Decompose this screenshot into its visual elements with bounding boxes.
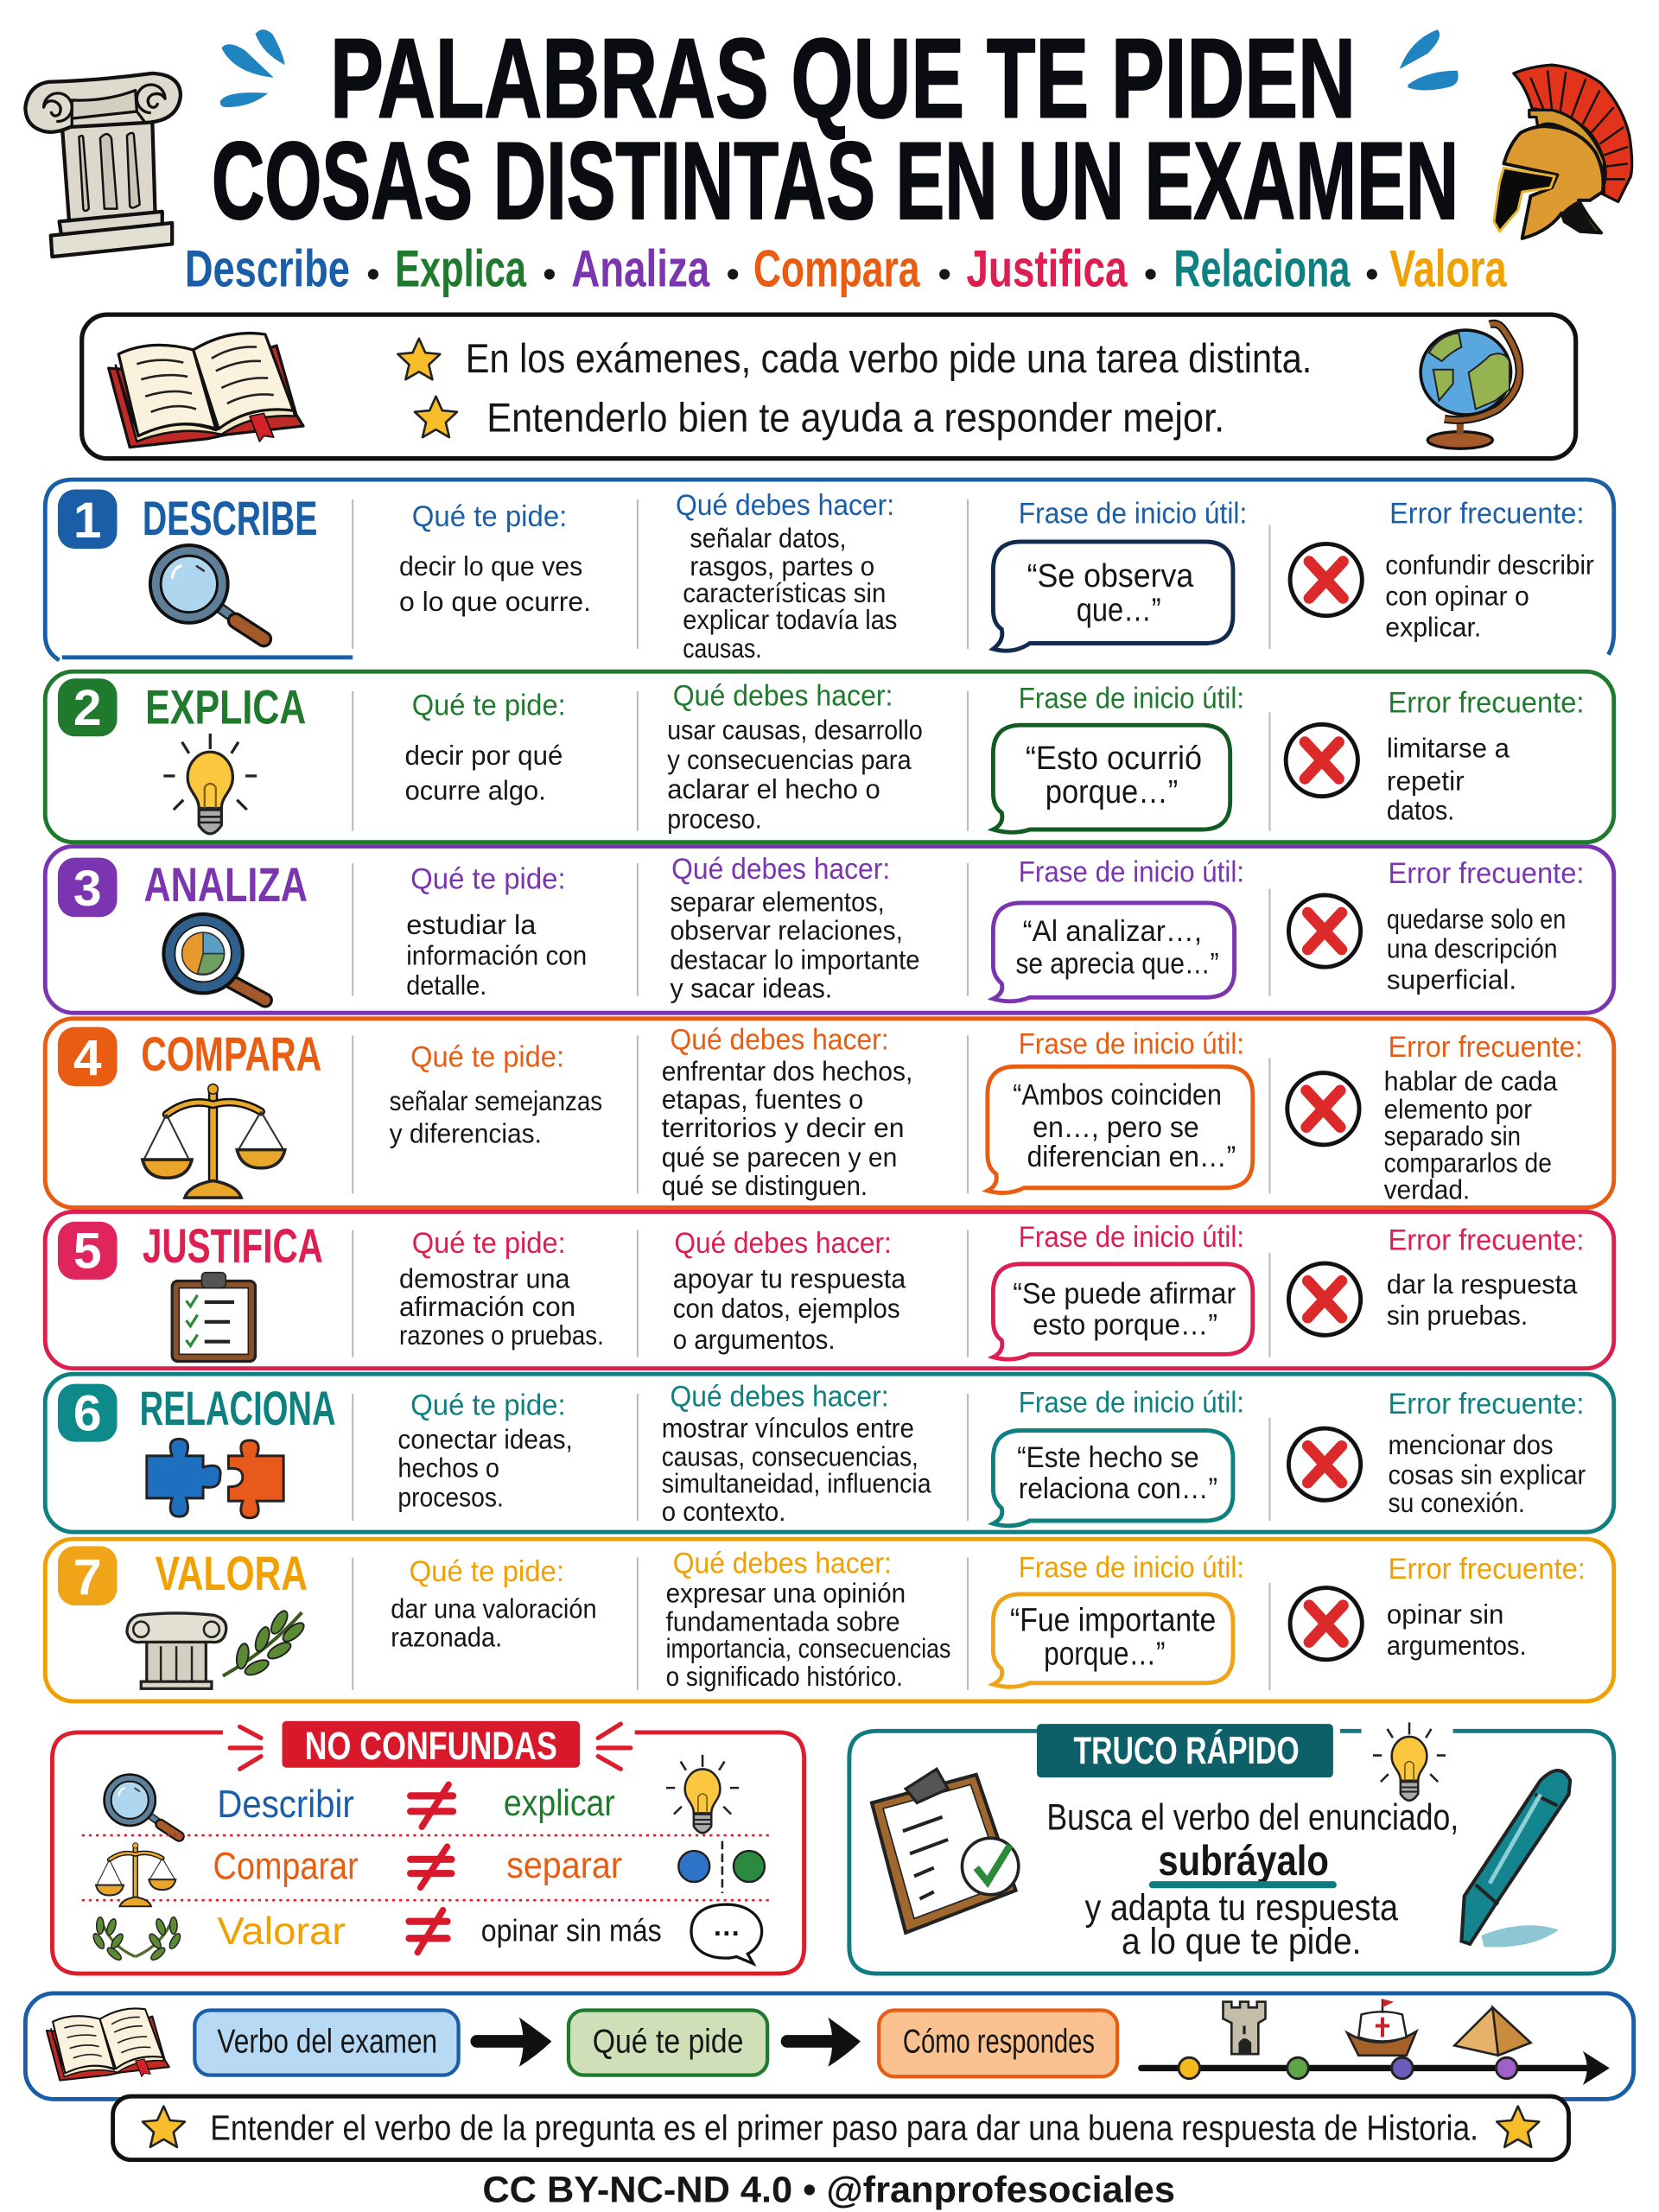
badge 4: 4	[73, 1030, 102, 1086]
badge 2	[58, 678, 118, 736]
column: qué debes hacer: explicar todavía las	[683, 605, 897, 635]
column: frase de inicio: Frase de inicio útil:	[1019, 1221, 1244, 1254]
column: frase de inicio	[993, 1551, 1244, 1687]
verb heading: JUSTIFICA	[143, 1219, 323, 1273]
column: qué te pide	[391, 1555, 597, 1652]
column: frase de inicio: se aprecia que…”	[1016, 948, 1219, 981]
column: frase de inicio: “Ambos coinciden	[1013, 1078, 1222, 1111]
text: tip: subráyalo	[1158, 1838, 1329, 1885]
text: tip: a lo que te pide.	[1122, 1921, 1362, 1961]
column: qué debes hacer: usar causas, desarrollo	[667, 715, 923, 746]
column: frase de inicio: porque…”	[1044, 1636, 1166, 1672]
panel: flow	[25, 1993, 1634, 2099]
verb heading: EXPLICA	[145, 681, 306, 734]
column: qué te pide: conectar ideas,	[397, 1425, 573, 1455]
column: qué debes hacer: expresar una opinión	[666, 1579, 906, 1609]
column dividers	[353, 863, 1269, 996]
panel: intro	[82, 315, 1576, 459]
column: frase de inicio	[993, 498, 1247, 651]
column: error frecuente: mencionar dos	[1389, 1430, 1554, 1460]
column: error frecuente: repetir	[1387, 766, 1465, 796]
column: qué debes hacer: enfrentar dos hechos,	[662, 1057, 912, 1087]
column: qué debes hacer: características sin	[683, 578, 886, 608]
icon: scales	[143, 1084, 285, 1198]
icon: light bulb	[163, 734, 257, 834]
column: qué debes hacer: apoyar tu respuesta	[673, 1264, 906, 1294]
column: qué debes hacer: proceso.	[667, 804, 762, 834]
panel: truco rapido	[849, 1722, 1614, 1974]
column: frase de inicio: esto porque…”	[1033, 1308, 1217, 1341]
icon: globe	[1421, 324, 1519, 448]
column: frase de inicio	[993, 683, 1244, 832]
icon: light bulb	[1373, 1722, 1446, 1801]
subtitle verbs: Valora	[1389, 238, 1507, 297]
column: qué debes hacer	[671, 853, 919, 1003]
column: qué debes hacer: territorios y decir en	[662, 1113, 905, 1143]
column: error frecuente	[1287, 1031, 1583, 1205]
banner: TRUCO RÁPIDO	[1073, 1729, 1300, 1772]
icon: two separated dots	[678, 1841, 765, 1893]
icon: marker pen	[1461, 1770, 1570, 1947]
column: error frecuente: dar la respuesta	[1387, 1269, 1578, 1300]
text: comparar: Comparar	[213, 1846, 359, 1888]
text: describir: Describir	[217, 1783, 354, 1826]
verb heading: RELACIONA	[140, 1382, 336, 1435]
intro line one: En los exámenes, cada verbo pide una tarea distinta.	[466, 336, 1312, 382]
column: error frecuente	[1288, 1388, 1586, 1518]
icon: ionic column	[25, 73, 181, 257]
column: error frecuente: elemento por	[1384, 1095, 1532, 1125]
column: qué debes hacer	[662, 1024, 912, 1201]
spark marks	[230, 1724, 631, 1769]
message text: Entender el verbo de la pregunta es el primer paso para dar una buena respuesta de Historia.	[210, 2108, 1478, 2148]
column: error frecuente: separado sin	[1384, 1122, 1521, 1152]
panel: 2 explica	[45, 671, 1614, 842]
column: qué debes hacer: señalar datos,	[690, 523, 847, 553]
intro line two: Entenderlo bien te ayuda a responder mejor.	[486, 396, 1224, 442]
icon: not equal	[409, 1910, 448, 1953]
column: error frecuente: opinar sin	[1387, 1599, 1503, 1630]
text: tip: y adapta tu respuesta	[1085, 1887, 1398, 1928]
column: frase de inicio: Frase de inicio útil:	[1019, 1386, 1244, 1419]
column: error frecuente: Error frecuente:	[1389, 857, 1584, 890]
column: qué te pide: Qué te pide:	[412, 690, 566, 722]
badge 7: 7	[73, 1549, 102, 1605]
column: error frecuente: una descripción	[1387, 934, 1557, 964]
column: qué debes hacer	[662, 1381, 931, 1527]
banner: NO CONFUNDAS	[305, 1724, 557, 1768]
banner	[1037, 1724, 1333, 1777]
column: error frecuente: su conexión.	[1389, 1488, 1525, 1518]
column: qué debes hacer: separar elementos,	[671, 887, 885, 918]
icon: star	[143, 2107, 185, 2147]
icon: tower	[1224, 2002, 1265, 2054]
badge 4	[58, 1027, 118, 1086]
column: error frecuente: verdad.	[1384, 1175, 1470, 1205]
icon: spartan helmet	[1494, 65, 1632, 238]
column: frase de inicio: que…”	[1077, 591, 1161, 627]
badge 6: 6	[73, 1386, 102, 1442]
column: qué te pide: dar una valoración	[391, 1594, 597, 1624]
step: cómo respondes	[879, 2011, 1117, 2076]
column: frase de inicio: “Esto ocurrió	[1026, 740, 1202, 776]
icon: checklist clipboard	[172, 1273, 256, 1362]
column: frase de inicio: diferencian en…”	[1027, 1141, 1236, 1173]
subtitle verbs	[185, 238, 1507, 297]
text: opinar sin más: opinar sin más	[481, 1913, 662, 1948]
panel: no confundas	[52, 1721, 804, 1974]
column: qué debes hacer: y sacar ideas.	[671, 973, 832, 1003]
column: qué debes hacer: observar relaciones,	[671, 915, 903, 945]
column: qué te pide: o lo que ocurre.	[399, 587, 591, 617]
subtitle verbs: •	[1144, 253, 1157, 294]
column: qué te pide: hechos o	[397, 1452, 499, 1483]
column: frase de inicio: relaciona con…”	[1019, 1472, 1217, 1505]
column: error frecuente	[1288, 857, 1584, 995]
column: qué debes hacer: Qué debes hacer:	[673, 1547, 892, 1580]
subtitle verbs: •	[727, 253, 740, 294]
step: verbo del examen: Verbo del examen	[217, 2024, 437, 2061]
column: error frecuente: Error frecuente:	[1389, 1224, 1584, 1257]
badge 5: 5	[73, 1224, 102, 1280]
verb heading: DESCRIBE	[143, 492, 317, 545]
badge 6	[58, 1384, 118, 1442]
icon: star	[415, 397, 457, 437]
badge 3: 3	[73, 861, 102, 917]
column: qué te pide: Qué te pide:	[412, 1227, 566, 1260]
panel: 1 describe	[45, 480, 1614, 664]
icon: not equal	[410, 1784, 453, 1827]
column: qué te pide	[397, 1389, 573, 1513]
column dividers	[353, 1557, 1269, 1690]
panel: 6 relaciona	[45, 1374, 1614, 1532]
subtitle verbs: •	[366, 253, 379, 294]
column: frase de inicio: “Este hecho se	[1017, 1441, 1199, 1474]
column: error frecuente: Error frecuente:	[1389, 1553, 1586, 1586]
column dividers	[353, 1394, 1269, 1521]
column: qué debes hacer: o significado histórico.	[666, 1662, 903, 1692]
column: error frecuente	[1290, 1553, 1586, 1661]
panel: 7 valora	[45, 1539, 1614, 1701]
column: error frecuente	[1290, 498, 1594, 642]
column: qué te pide	[399, 1227, 604, 1351]
icon: small column	[127, 1613, 226, 1688]
icon: not equal	[410, 1847, 451, 1887]
icon: ship	[1347, 1999, 1416, 2056]
column: frase de inicio	[993, 855, 1244, 1001]
column: qué te pide: Qué te pide:	[410, 863, 566, 896]
text: valorar: Valorar	[217, 1910, 346, 1953]
column: frase de inicio: “Se observa	[1027, 557, 1193, 594]
icon: pyramid	[1454, 2007, 1530, 2056]
column: qué debes hacer: o argumentos.	[673, 1325, 836, 1355]
column: frase de inicio: Frase de inicio útil:	[1019, 1551, 1244, 1584]
column: error frecuente	[1288, 1224, 1584, 1335]
column: qué debes hacer: Qué debes hacer:	[674, 1227, 892, 1260]
column: qué te pide: señalar semejanzas	[390, 1086, 602, 1116]
icon: clipboard with check	[872, 1769, 1019, 1933]
badge 1: 1	[73, 493, 102, 549]
column: qué te pide	[399, 500, 591, 617]
step: qué te pide: Qué te pide	[593, 2024, 743, 2061]
column: error frecuente: con opinar o	[1385, 581, 1529, 611]
icon: magnifier	[150, 545, 264, 639]
column: error frecuente: confundir describir	[1385, 550, 1594, 580]
column: qué te pide: y diferencias.	[390, 1118, 542, 1148]
column: qué debes hacer: causas.	[683, 633, 762, 664]
badge 1	[58, 490, 118, 549]
column: qué debes hacer: Qué debes hacer:	[671, 853, 890, 886]
icon: speech bubble	[691, 1904, 762, 1964]
column: qué debes hacer: o contexto.	[662, 1497, 785, 1527]
column: qué debes hacer	[673, 1227, 906, 1355]
icon: scales	[96, 1843, 175, 1906]
timeline	[1141, 1999, 1610, 2085]
step: qué te pide	[569, 2011, 767, 2075]
icon: star	[1497, 2107, 1539, 2147]
icon: star	[397, 339, 440, 379]
column dividers	[353, 1230, 1269, 1357]
column dividers	[353, 691, 1269, 831]
column: frase de inicio	[993, 1221, 1253, 1359]
column: qué te pide: decir lo que ves	[399, 551, 582, 582]
column: qué te pide: Qué te pide:	[409, 1555, 564, 1588]
column: qué te pide	[405, 690, 566, 806]
column: frase de inicio: en…, pero se	[1033, 1111, 1199, 1144]
step: verbo del examen	[194, 2011, 459, 2075]
column: qué debes hacer	[667, 679, 923, 834]
column: qué te pide: decir por qué	[405, 741, 563, 771]
column: frase de inicio: Frase de inicio útil:	[1019, 1028, 1244, 1061]
subtitle verbs: Analiza	[571, 238, 710, 297]
column: error frecuente: limitarse a	[1387, 734, 1510, 764]
column: error frecuente: argumentos.	[1387, 1630, 1527, 1661]
column: frase de inicio: porque…”	[1046, 773, 1178, 810]
badge 7	[58, 1546, 118, 1605]
column: error frecuente: datos.	[1387, 796, 1454, 826]
column: qué te pide: Qué te pide:	[410, 1389, 566, 1422]
icon: laurel	[92, 1917, 182, 1962]
subtitle verbs: •	[543, 253, 556, 294]
icon: light bulb	[666, 1755, 739, 1833]
column: qué te pide: Qué te pide:	[410, 1040, 564, 1073]
icon: magnifier with pie chart	[163, 914, 265, 1001]
icon: speech bubble: …	[712, 1910, 741, 1942]
column: qué debes hacer: aclarar el hecho o	[667, 774, 880, 804]
column: qué debes hacer: y consecuencias para	[667, 745, 912, 775]
arrow	[787, 2018, 861, 2067]
column: error frecuente: hablar de cada	[1384, 1066, 1558, 1096]
icon: laurel branch	[223, 1609, 307, 1678]
badge 3	[58, 858, 118, 917]
icon: magnifier	[105, 1775, 179, 1836]
column: qué te pide	[406, 863, 587, 1001]
column dividers	[353, 1035, 1269, 1193]
column: qué debes hacer: fundamentada sobre	[666, 1606, 900, 1637]
column: frase de inicio: “Se puede afirmar	[1013, 1278, 1236, 1311]
icon: right blue splash	[1400, 29, 1459, 90]
text: explicar: explicar	[504, 1783, 615, 1823]
column: error frecuente	[1286, 686, 1584, 826]
column: qué te pide: afirmación con	[399, 1292, 575, 1322]
step: cómo respondes: Cómo respondes	[903, 2024, 1095, 2061]
badge 2: 2	[73, 680, 102, 736]
subtitle verbs: •	[1365, 253, 1378, 294]
icon: left blue splash	[220, 29, 285, 107]
column: qué debes hacer: Qué debes hacer:	[673, 679, 893, 712]
column: error frecuente: superficial.	[1387, 964, 1516, 995]
column: error frecuente: explicar.	[1385, 612, 1481, 642]
column: qué debes hacer: destacar lo importante	[671, 945, 919, 976]
column: qué debes hacer: rasgos, partes o	[690, 551, 874, 582]
column: frase de inicio: Frase de inicio útil:	[1019, 498, 1247, 531]
verb heading: COMPARA	[141, 1027, 321, 1081]
verb heading: ANALIZA	[144, 858, 308, 912]
icon: open book	[109, 334, 303, 448]
subtitle verbs: Describe	[185, 238, 350, 297]
column: frase de inicio: “Fue importante	[1010, 1601, 1216, 1637]
column: qué te pide: Qué te pide:	[412, 500, 567, 533]
column: qué debes hacer: importancia, consecuencias	[666, 1633, 950, 1663]
column: error frecuente: cosas sin explicar	[1389, 1460, 1586, 1491]
column: qué debes hacer: causas, consecuencias,	[662, 1441, 918, 1471]
column dividers	[353, 499, 1269, 649]
column: qué debes hacer: Qué debes hacer:	[676, 489, 894, 522]
column: error frecuente: sin pruebas.	[1387, 1300, 1528, 1331]
panel: 4 compara	[45, 1019, 1614, 1208]
column: frase de inicio	[993, 1386, 1244, 1526]
column: qué te pide: razones o pruebas.	[399, 1320, 604, 1351]
column: frase de inicio	[988, 1028, 1253, 1193]
text: separar: separar	[506, 1845, 622, 1885]
icon: open book	[47, 2008, 169, 2081]
subtitle verbs: •	[938, 253, 951, 294]
column: frase de inicio: Frase de inicio útil:	[1019, 855, 1244, 888]
column: qué debes hacer: Qué debes hacer:	[671, 1024, 889, 1057]
subtitle verbs: Relaciona	[1173, 238, 1351, 297]
column: qué te pide: estudiar la	[406, 910, 537, 940]
column: error frecuente: Error frecuente:	[1389, 1388, 1584, 1421]
column: qué te pide: detalle.	[406, 970, 486, 1001]
column: error frecuente: Error frecuente:	[1389, 1031, 1583, 1064]
text: tip: Busca el verbo del enunciado,	[1046, 1797, 1459, 1838]
column: error frecuente: Error frecuente:	[1389, 498, 1584, 531]
badge 5	[58, 1222, 118, 1280]
column: qué debes hacer	[666, 1547, 950, 1692]
column: qué debes hacer: etapas, fuentes o	[662, 1084, 863, 1115]
footer credit: CC BY-NC-ND 4.0 • @franprofesociales	[482, 2170, 1175, 2210]
panel: 5 justifica	[45, 1211, 1614, 1369]
column: qué te pide: razonada.	[391, 1622, 502, 1652]
arrow	[477, 2018, 551, 2067]
column: qué te pide: información con	[406, 941, 587, 971]
column: qué te pide: ocurre algo.	[405, 776, 546, 806]
text: tip	[1046, 1797, 1459, 1961]
column: qué debes hacer: qué se parecen y en	[662, 1142, 897, 1173]
column: qué te pide: demostrar una	[399, 1264, 570, 1294]
column: qué debes hacer	[676, 489, 897, 664]
title	[212, 16, 1459, 242]
subtitle verbs: Explica	[395, 238, 526, 297]
panel: 3 analiza	[45, 847, 1614, 1013]
column: qué debes hacer: Qué debes hacer:	[671, 1381, 889, 1414]
column: error frecuente: Error frecuente:	[1389, 686, 1584, 719]
subtitle verbs: Compara	[753, 238, 920, 297]
column: error frecuente: quedarse solo en	[1387, 904, 1566, 934]
column: frase de inicio: Frase de inicio útil:	[1019, 683, 1244, 715]
icon: puzzle pieces	[147, 1439, 283, 1518]
verb heading: VALORA	[156, 1547, 308, 1600]
column: qué debes hacer: mostrar vínculos entre	[662, 1414, 914, 1444]
column: qué debes hacer: simultaneidad, influencia	[662, 1468, 931, 1498]
subtitle verbs: Justifica	[966, 238, 1128, 297]
column: qué debes hacer: qué se distinguen.	[662, 1171, 868, 1201]
column: frase de inicio: “Al analizar…,	[1023, 915, 1202, 948]
dotted line	[82, 1835, 773, 1900]
column: error frecuente: compararlos de	[1384, 1148, 1552, 1179]
panel: bottom message	[113, 2096, 1569, 2160]
column: qué te pide	[390, 1040, 602, 1148]
column: qué debes hacer: con datos, ejemplos	[673, 1294, 900, 1324]
column: qué te pide: procesos.	[397, 1483, 504, 1513]
